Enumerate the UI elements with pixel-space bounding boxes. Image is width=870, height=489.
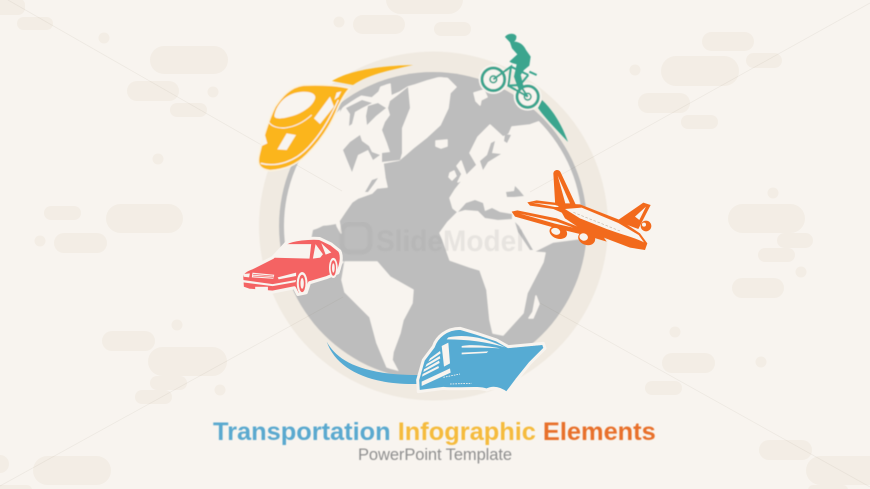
rider [505, 34, 531, 89]
ship wake swoosh [327, 342, 418, 384]
ship hull [418, 328, 545, 393]
watermark: SlideModel [376, 225, 524, 258]
mediterranean [458, 200, 512, 220]
fuselage [557, 203, 647, 250]
continents [284, 76, 581, 372]
icon: train [258, 65, 413, 171]
train trail swoosh [332, 65, 413, 85]
gulf of mexico [311, 224, 336, 237]
engines [548, 224, 569, 241]
icon: cyclist [479, 34, 568, 142]
car front details [252, 273, 274, 279]
wheels [479, 65, 508, 94]
car body [242, 238, 341, 294]
icon: car [242, 238, 341, 295]
madagascar [529, 296, 539, 318]
arctic channels [346, 100, 386, 126]
near wing [512, 210, 607, 242]
baffin bay [382, 87, 410, 162]
ireland and britain [449, 161, 467, 182]
iceland [436, 140, 447, 148]
globe ocean disc [279, 72, 587, 380]
car wheels [297, 272, 308, 295]
cyclist trail swoosh [538, 100, 568, 142]
tail fin [553, 170, 577, 207]
hudson bay [343, 135, 380, 172]
south america [342, 262, 413, 375]
globe outer ring [259, 52, 608, 400]
north america and greenland [284, 76, 457, 264]
subtitle: PowerPoint Template [358, 446, 512, 464]
rear stabiliser [617, 203, 651, 229]
eurasia and africa [438, 120, 581, 336]
frame [493, 67, 537, 97]
train body [258, 85, 350, 171]
svalbard [474, 90, 487, 105]
car windows [271, 243, 331, 259]
baltic sea [480, 134, 511, 170]
icon: cruise ship [327, 328, 545, 393]
red sea [515, 222, 533, 250]
icon: airplane [512, 170, 651, 250]
far wing [527, 200, 590, 218]
globe [259, 52, 608, 400]
black sea [506, 186, 524, 197]
inland seas and bays [311, 87, 533, 250]
title: Transportation Infographic Elements [213, 418, 656, 446]
ship decks [422, 343, 450, 377]
